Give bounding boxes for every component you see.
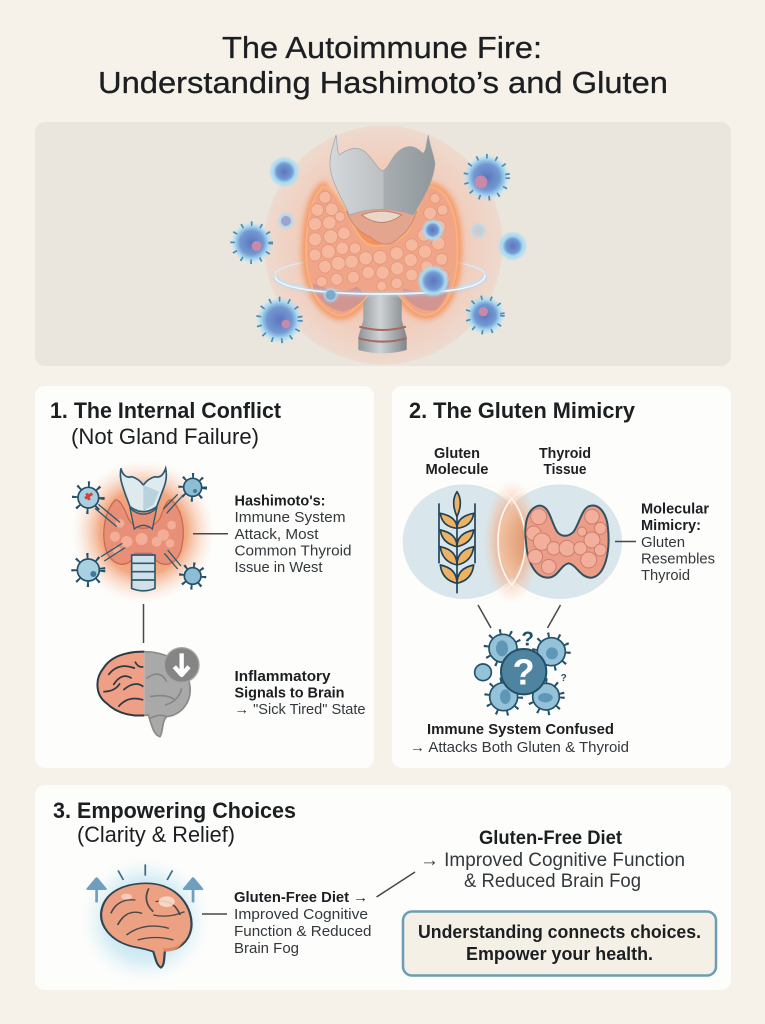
label: inflammatory signals: → "Sick Tired" State [234,702,366,718]
heading: panel 1 [50,398,282,449]
callout: Understanding connects choices. [418,922,701,942]
label: inflammatory signals: Signals to Brain [234,686,345,702]
label: Hashimoto's: Attack, Most [234,527,318,543]
panel: hero thyroid illustration [35,122,731,366]
gland glow [306,187,457,315]
venn labels: Molecule [426,462,488,478]
back of energy ring [275,257,485,293]
heading: panel 1: 1. The Internal Conflict [50,398,282,423]
label: Hashimoto's: Issue in West [234,560,322,576]
label: inflammatory signals [234,669,366,718]
label: immune system confused: → Attacks Both Gluten & Thyroid [410,740,629,756]
thyroid gland [306,187,457,315]
icon: confused immune cells: ? [561,673,567,684]
label: molecular mimicry [641,502,715,584]
panel: 1 the internal conflict [35,386,374,768]
title: Understanding Hashimoto’s and Gluten [98,65,668,100]
venn labels: Gluten [434,446,480,462]
icon: brain half grey with down arrow [97,648,199,737]
connectors: venn to label and immune cluster [478,542,636,628]
label: gluten-free diet left: Function & Reduced [234,924,372,940]
label: immune system confused [410,722,629,756]
venn labels: Tissue [544,462,586,478]
heading: panel 3: (Clarity & Relief) [77,822,235,847]
heading: panel 1: (Not Gland Failure) [71,424,259,449]
callout: Empower your health. [466,944,653,964]
label: molecular mimicry: Thyroid [641,568,690,584]
heading: panel 3 [53,798,296,847]
venn labels: Thyroid [539,446,591,462]
connector: thyroid to label [193,533,228,535]
connectors: brain to text to detail [202,872,415,914]
label: inflammatory signals: Inflammatory [234,669,331,685]
title [98,30,668,100]
label: Hashimoto's: Common Thyroid [234,544,352,560]
label: molecular mimicry: Mimicry: [641,518,701,534]
callout [403,912,716,976]
label: molecular mimicry: Molecular [641,502,709,518]
icon: thyroid under immune attack [72,460,215,603]
label: gluten-free diet left: Brain Fog [234,941,299,957]
connector: thyroid to brain [142,604,144,643]
label: Hashimoto's: Hashimoto's: [234,494,326,510]
label: gluten-free diet right: & Reduced Brain Fog [464,871,641,892]
label: gluten-free diet right: Gluten-Free Diet [479,828,623,849]
heading: panel 3: 3. Empowering Choices [53,798,296,823]
heading: panel 2: 2. The Gluten Mimicry [409,398,636,423]
label: gluten-free diet left [234,890,372,957]
label: immune system confused: Immune System Confused [427,722,614,738]
icon: confused immune cells [475,628,568,713]
icon: wheat [439,492,475,593]
icon: confused immune cells: ? [513,651,535,692]
label: Hashimoto's [234,494,352,576]
label: Hashimoto's: Immune System [234,510,346,526]
icon: thyroid tissue [525,506,609,578]
panel: 2 the gluten mimicry [392,386,731,768]
label: gluten-free diet right [420,828,685,892]
title: The Autoimmune Fire: [222,30,542,65]
label: gluten-free diet left: Improved Cognitive [234,907,368,923]
venn diagram: wheat and thyroid [403,480,622,603]
laryngeal cartilage [330,135,435,244]
trachea [358,287,407,353]
icon: confused immune cells: ? [521,628,534,651]
label: gluten-free diet left: Gluten-Free Diet → [234,890,368,906]
label: molecular mimicry: Resembles [641,552,715,568]
label: molecular mimicry: Gluten [641,535,685,551]
icon: healthy glowing brain [81,857,210,983]
immune cells [233,157,526,341]
panel: 3 empowering choices [35,785,731,990]
front of energy ring [275,275,485,294]
venn labels [426,446,591,478]
label: gluten-free diet right: → Improved Cognitive Function [420,850,685,871]
